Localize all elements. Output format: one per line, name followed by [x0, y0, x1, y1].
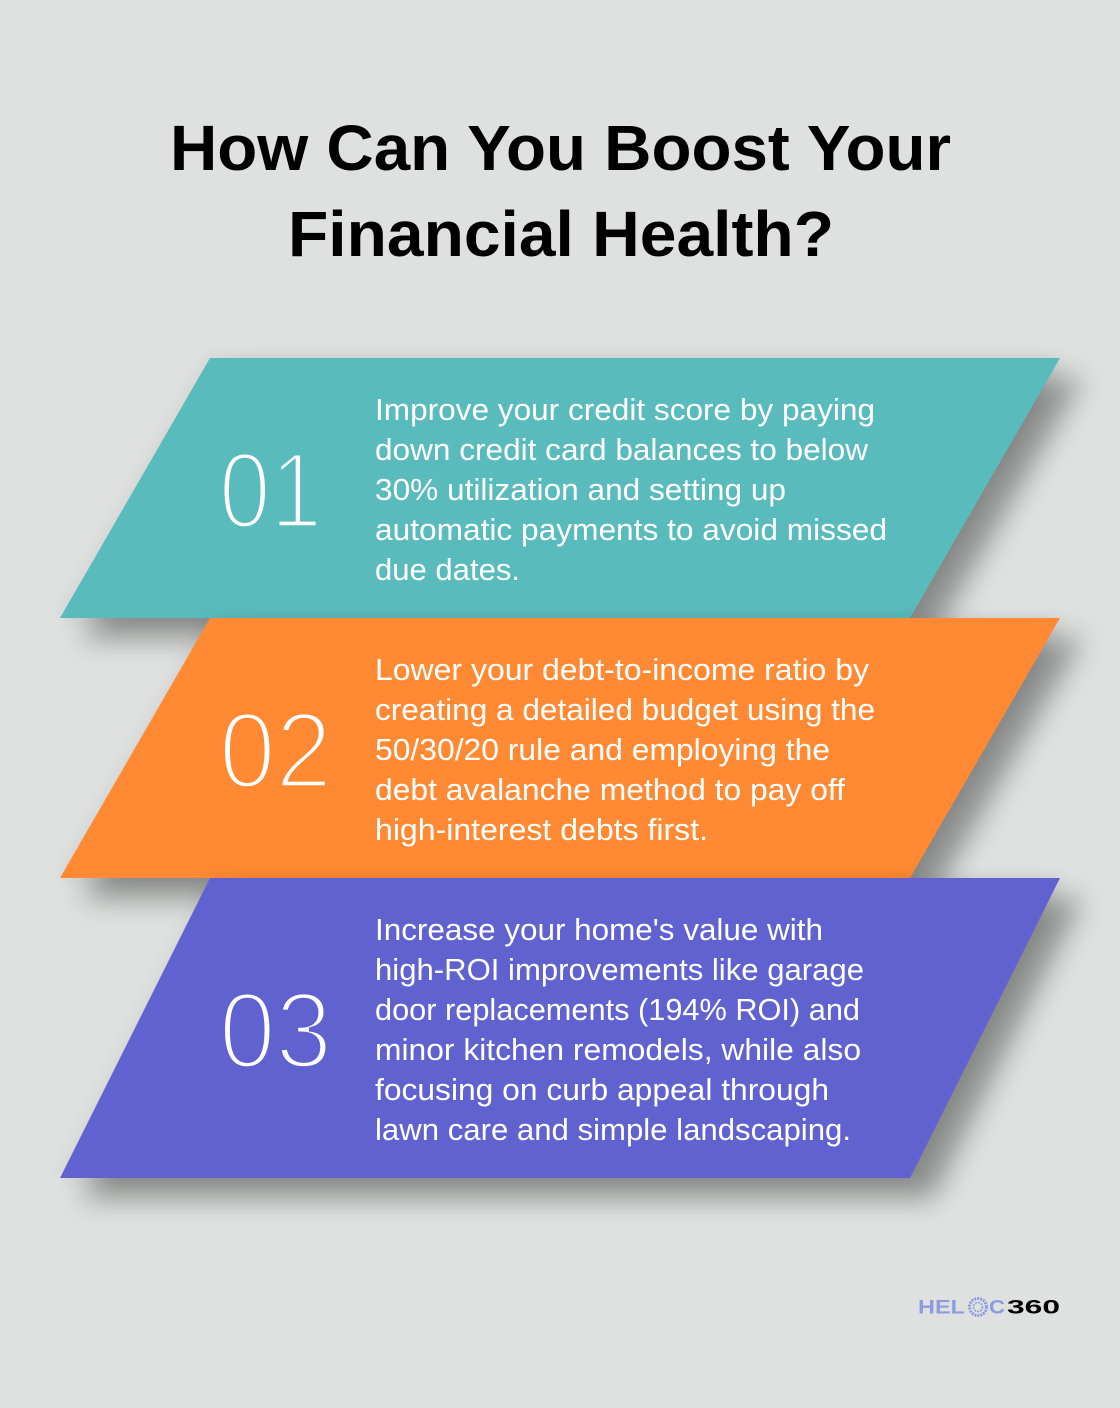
text: step 01 description: down credit card balances to below	[375, 432, 869, 467]
text: step 03 description: lawn care and simple landscaping.	[375, 1112, 851, 1147]
text: step 01 description: automatic payments to avoid missed	[375, 512, 887, 547]
logo: HELOC360: 360	[1007, 1298, 1060, 1318]
text: step 03 description: Increase your home's value with	[375, 912, 823, 947]
text: step 01 description: due dates.	[375, 552, 520, 587]
text: step 02 description: debt avalanche method to pay off	[375, 772, 845, 807]
panel: step 01	[60, 358, 1082, 638]
text: step 01 description	[375, 392, 887, 587]
text: step 02 description: high-interest debts first.	[375, 812, 708, 847]
number 03: 03	[219, 970, 332, 1090]
text: step 01 description: 30% utilization and setting up	[375, 472, 786, 507]
text: step 02 description: 50/30/20 rule and employing the	[375, 732, 830, 767]
number 01: 01	[219, 430, 322, 550]
text: step 03 description: high-ROI improvements like garage	[375, 952, 864, 987]
text: step 01 description: Improve your credit score by paying	[375, 392, 875, 427]
logo: HELOC360: C	[989, 1298, 1005, 1318]
panel: step 02	[60, 618, 1082, 898]
title: How Can You Boost Your	[170, 112, 951, 184]
text: step 03 description: minor kitchen remodels, while also	[375, 1032, 861, 1067]
text: step 02 description	[375, 652, 875, 847]
text: step 02 description: creating a detailed budget using the	[375, 692, 875, 727]
text: step 03 description: focusing on curb appeal through	[375, 1072, 829, 1107]
panel: step 03	[60, 878, 1082, 1198]
icon: logo swirl	[970, 1298, 986, 1316]
number 02: 02	[219, 690, 332, 810]
title	[170, 112, 951, 270]
text: step 03 description	[375, 912, 864, 1147]
logo: HELOC360: HEL	[918, 1298, 965, 1318]
text: step 02 description: Lower your debt-to-income ratio by	[375, 652, 870, 687]
title: Financial Health?	[288, 198, 834, 270]
text: step 03 description: door replacements (194% ROI) and	[375, 992, 860, 1027]
logo: HELOC360	[918, 1298, 1060, 1318]
